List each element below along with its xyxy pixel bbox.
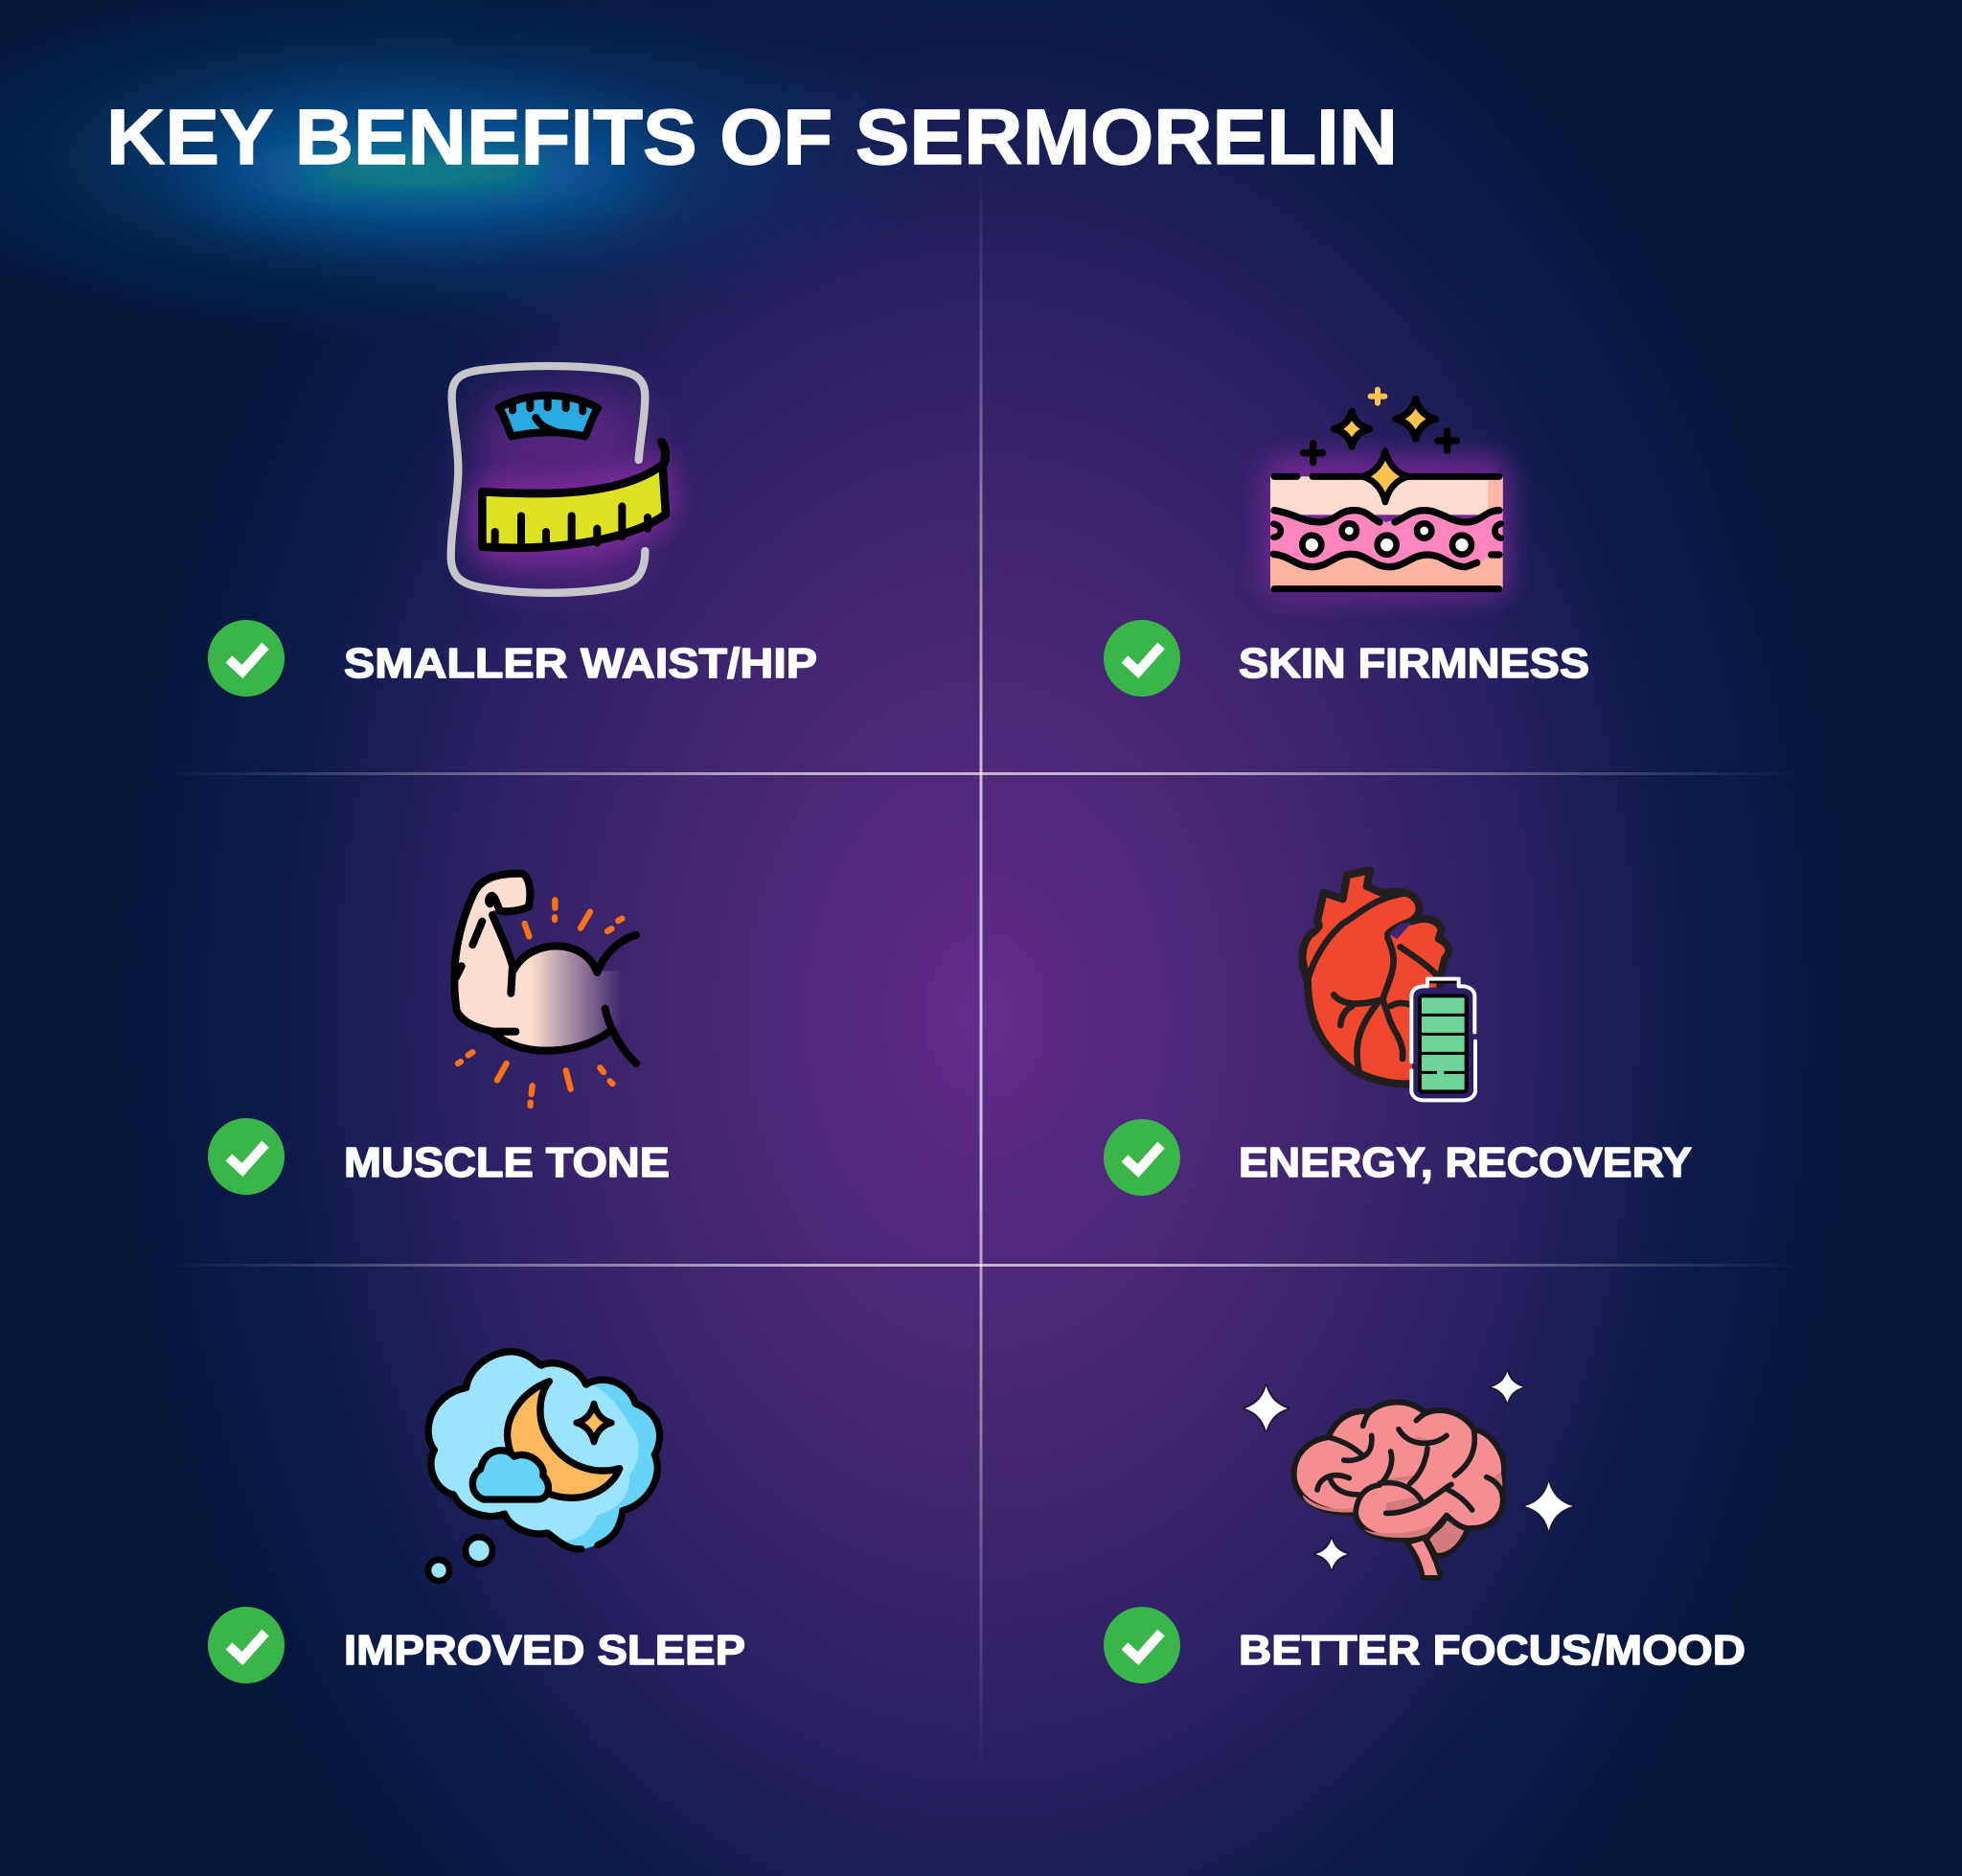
check badge xyxy=(208,1607,285,1683)
icon: thought cloud with moon xyxy=(428,1352,660,1581)
label: SKIN FIRMNESS xyxy=(1239,640,1589,687)
panel: smaller waist/hip xyxy=(208,366,817,697)
check badge xyxy=(208,1118,285,1195)
icon: brain with sparkles xyxy=(1244,1372,1573,1578)
panel: muscle tone xyxy=(208,874,670,1195)
label: IMPROVED SLEEP xyxy=(344,1627,745,1674)
icon: scale with measuring tape xyxy=(451,366,666,593)
check badge xyxy=(1104,1119,1180,1196)
title glow xyxy=(0,0,958,345)
label: ENERGY, RECOVERY xyxy=(1239,1139,1692,1186)
label: MUSCLE TONE xyxy=(344,1139,670,1186)
check badge xyxy=(1104,1607,1180,1683)
icon: skin layers with sparkles xyxy=(1265,390,1509,597)
panel: better focus/mood xyxy=(1104,1372,1745,1683)
panel: energy, recovery xyxy=(1104,870,1692,1196)
label: BETTER FOCUS/MOOD xyxy=(1239,1627,1745,1674)
panel: improved sleep xyxy=(208,1352,745,1683)
title: KEY BENEFITS OF SERMORELIN xyxy=(106,94,1398,181)
panel: skin firmness xyxy=(1104,390,1589,697)
check badge xyxy=(208,620,285,697)
label: SMALLER WAIST/HIP xyxy=(344,640,817,687)
icon: flexed arm xyxy=(454,874,636,1106)
icon: heart with battery xyxy=(1303,870,1475,1100)
check badge xyxy=(1104,620,1180,697)
grid dividers xyxy=(163,163,1801,1773)
